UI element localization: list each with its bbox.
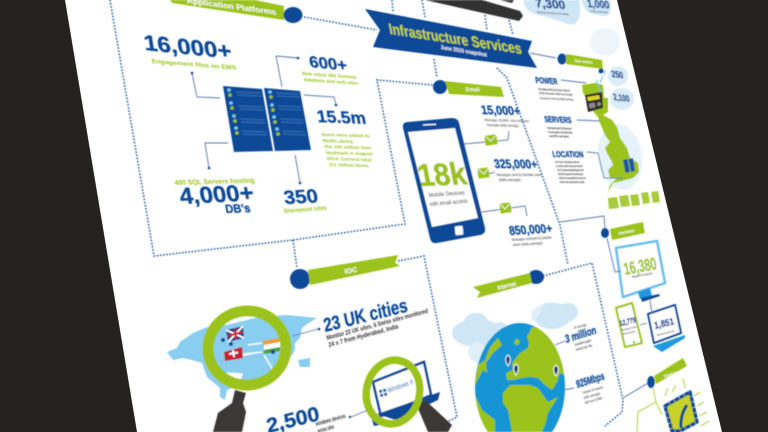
- stat: 15,000+: Message 15,000+ virus infected: [484, 118, 529, 123]
- stat: 325,000+: Messages sent by Deloitte users: [496, 173, 542, 177]
- stat: 16,000+: Engagement files on EMS: [151, 58, 237, 72]
- stat: 15.5m: [315, 107, 373, 168]
- globe: [473, 323, 568, 432]
- stat: 600+: Web sites/ 400 Domino: [301, 71, 357, 81]
- power: [534, 75, 586, 102]
- stat: 350: 350: [282, 186, 320, 209]
- power: 1000 of power which is enough: [538, 91, 573, 97]
- location: [551, 149, 623, 184]
- location: UK IT services (including around: [556, 168, 584, 172]
- stat: 15.5m: Items were added to: [321, 132, 370, 138]
- power: Our data centres consume about: [537, 87, 570, 93]
- title banner: Infrastructure Services: [387, 21, 523, 58]
- stat: 850,000+: Messages received by Deloitte: [511, 236, 552, 242]
- stats: 250 and 2,100: 250: [610, 69, 624, 81]
- laptop: 1,851: [653, 316, 676, 332]
- stat: 16,000+: 16,000+: [142, 30, 233, 64]
- application platforms banner: [170, 0, 302, 23]
- laptop: [640, 300, 685, 352]
- server racks: [223, 86, 311, 152]
- top dark bar: [425, 0, 523, 21]
- stat: 3 million: [555, 323, 597, 352]
- small laptop magnifier: Windows 8: [387, 379, 414, 395]
- location: We have 3x data centres in: [554, 160, 580, 164]
- hardware heading: [601, 222, 645, 240]
- servers: in our environment of which: [547, 130, 573, 135]
- stat: 850,000+: 850,000+: [508, 222, 554, 238]
- stat: 925Mbps: 925Mbps: [575, 370, 605, 391]
- power: POWER: [534, 75, 559, 86]
- stats: 250 and 2,100: 2,100: [612, 92, 630, 105]
- flags: [221, 326, 280, 361]
- stat: 15.5m: 2014. Current total: [326, 156, 372, 162]
- stat: 23 UK cities: [293, 296, 429, 349]
- servers: SERVERS: [543, 114, 573, 125]
- stat: 3 million: On average: [573, 323, 587, 330]
- phone: with email access: [428, 199, 468, 208]
- email lines and envelopes: [464, 131, 527, 216]
- stat: 925Mbps: Deloitte UK internet: [582, 385, 603, 395]
- stat: 15.5m: the 100 million Item: [324, 144, 372, 150]
- tablet: Managed mobile: [621, 325, 637, 332]
- email heading: Email: [465, 87, 481, 93]
- server callout lines: [191, 56, 337, 184]
- stat: 15,000+: 15,000+: [480, 103, 522, 118]
- stat: 325,000+: 325,000+: [493, 157, 539, 171]
- stat: 325,000+: (daily average): [498, 178, 522, 182]
- data centres heading: [558, 54, 603, 69]
- ioc heading: IOC: [344, 267, 358, 276]
- hardware heading: Hardware: [618, 228, 635, 236]
- tablet: [616, 303, 642, 347]
- stat: 600+: 600+: [308, 53, 348, 75]
- phone: [403, 118, 485, 243]
- location: for tennis courts side by side: [559, 180, 585, 184]
- stat: 4,000+ DB's: 4,000+: [177, 179, 256, 209]
- stat: 23 UK cities: 24 x 7 from Hyderabad, India: [328, 323, 399, 349]
- phone: 18k: [414, 156, 470, 193]
- telephony heading: [647, 358, 687, 388]
- internet heading: [473, 270, 544, 298]
- small laptop magnifier: [360, 355, 452, 432]
- stat: 23 UK cities: Monitor 23 UK sites, 6 Swiss sites monitored: [326, 308, 429, 342]
- power: to power over 22,000 homes: [539, 96, 574, 102]
- stat: 16,000+: [142, 30, 237, 72]
- stat: 15,000+: messages (daily average): [486, 123, 519, 128]
- magnifier: [203, 306, 291, 432]
- stat: 925Mbps: traffic averaging: [583, 391, 601, 400]
- stat: 350: Sharepoint sites: [283, 206, 328, 215]
- stat: 3 million: available pages: [574, 338, 592, 347]
- data centres heading: Data centres: [574, 58, 593, 65]
- stat: 850,000+: users (daily average): [512, 241, 544, 247]
- tablet: devices (all types): [622, 329, 636, 336]
- title banner: June 2015 snapshot: [440, 45, 488, 59]
- location: which is equivalent to around: [558, 176, 586, 180]
- clouds: Windows Servers in the estate: [536, 10, 569, 16]
- stat: 3 million: viewed per day: [575, 343, 593, 352]
- tablet: 12,779: [619, 315, 637, 328]
- uk map: [582, 83, 646, 193]
- stats: 250 and 2,100: [608, 66, 634, 110]
- location: LOCATION: [551, 149, 584, 159]
- stat: 925Mbps: traffic levels of 925Mbit: [584, 396, 602, 405]
- stat: 850,000+: [508, 222, 554, 247]
- servers: over 80% are virtual: [548, 134, 569, 139]
- email heading: [433, 80, 504, 97]
- world map: [167, 315, 317, 400]
- internet heading: Internet: [497, 281, 517, 292]
- location: London which across most of: [555, 164, 583, 168]
- stat: 4,000+ DB's: 400 SQL Servers hosting: [174, 178, 255, 187]
- telephony heading: Telephony: [663, 370, 678, 379]
- stat: 925Mbps: [564, 370, 605, 405]
- stat: 15.5m: Mandito, passing: [322, 138, 353, 144]
- stat: 2,500: [265, 403, 368, 432]
- stat: 23 UK cities: 23 UK cities: [322, 296, 409, 337]
- monitor: [607, 238, 665, 302]
- clouds: [523, 0, 620, 56]
- clouds behind globe: [452, 302, 578, 362]
- green server blocks: [608, 191, 660, 209]
- laptop: Data devices (physical): [656, 329, 675, 337]
- phone: Mobile Devices: [428, 191, 465, 199]
- servers: We have over 2,200 servers: [546, 126, 573, 131]
- radio icon: [585, 68, 605, 112]
- title banner: [365, 9, 537, 68]
- location: 10,000 square foot of space: [557, 172, 584, 176]
- chip icon: [637, 378, 709, 432]
- stat: 4,000+ DB's: DB's: [224, 201, 252, 216]
- stat: 3 million: 3 million: [564, 324, 597, 346]
- servers: [543, 114, 600, 139]
- ioc heading: [290, 255, 400, 289]
- stat: 15,000+: [480, 103, 529, 128]
- stat: 350: [282, 186, 328, 215]
- stat: 15.5m: 111 million Items: [328, 162, 369, 168]
- clouds: Linux servers: [589, 9, 609, 14]
- stat: 325,000+: [493, 157, 542, 182]
- frame connector lines: [110, 0, 648, 426]
- stat: 600+: [301, 53, 359, 87]
- stat: 2,500: windows devices: [315, 414, 347, 428]
- monitor: 16,380: [622, 253, 658, 279]
- stat: 15.5m: 15.5m: [315, 107, 367, 128]
- monitor: Managed PCs (physical): [631, 271, 653, 279]
- stat: 600+: database and web sites: [303, 77, 359, 87]
- stat: 15.5m: landmark in August: [325, 150, 373, 156]
